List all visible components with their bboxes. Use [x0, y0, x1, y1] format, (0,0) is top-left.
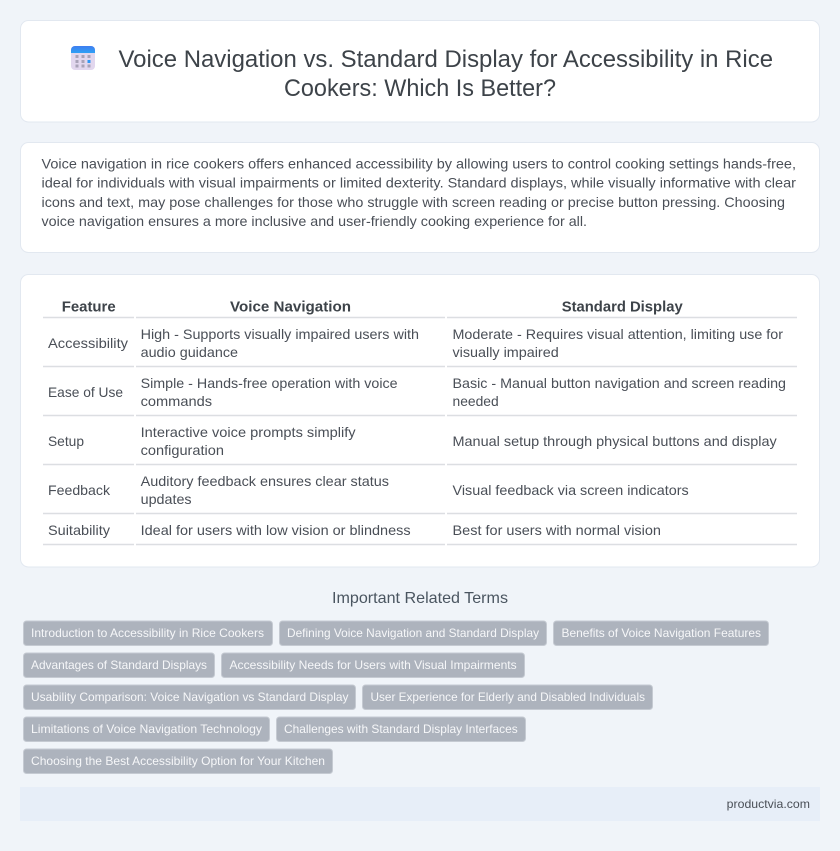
text block: introduction: Voice navigation in rice cookers offers enhanced accessibility by allowing users to control cooking settings hands-free, [42, 156, 796, 172]
tag: limitations: Limitations of Voice Navigation Technology [31, 722, 262, 736]
row: setup [48, 424, 777, 458]
tag: introduction [24, 621, 272, 646]
tag: usability comparison [24, 685, 356, 710]
row: suitability: Ideal for users with low vision or blindness [141, 522, 411, 538]
row: setup: configuration [141, 442, 224, 458]
row: accessibility: High - Supports visually impaired users with [141, 326, 419, 342]
tag: benefits: Benefits of Voice Navigation Features [562, 626, 761, 640]
row: feedback: updates [141, 491, 192, 507]
row: feedback: Auditory feedback ensures clear status [141, 473, 389, 489]
row: ease of use: commands [141, 393, 212, 409]
row: feedback [48, 473, 689, 507]
tag: accessibility needs [222, 653, 524, 678]
row: ease of use [48, 375, 786, 409]
row: accessibility: visually impaired [452, 344, 559, 360]
panel: header [20, 20, 820, 122]
row: suitability [48, 522, 661, 538]
tag: defining [280, 621, 546, 646]
row: ease of use: needed [452, 393, 499, 409]
text block: introduction: voice navigation ensures a more inclusive and user-friendly cooking experience for all. [42, 213, 587, 229]
row: accessibility [48, 326, 783, 360]
title: Cookers: Which Is Better? [284, 75, 556, 102]
row: suitability: Suitability [48, 522, 110, 538]
footer [20, 787, 820, 821]
tag: introduction: Introduction to Accessibility in Rice Cookers [31, 626, 264, 640]
icon: calendar [71, 46, 95, 70]
row: ease of use: Basic - Manual button navigation and screen reading [452, 375, 786, 391]
heading: important related terms: Important Related Terms [332, 590, 508, 607]
tag: defining: Defining Voice Navigation and Standard Display [287, 626, 539, 640]
text block: introduction: ideal for individuals with visual impairments or limited dexterity. Standard displays, while visually informative with clear [42, 175, 796, 191]
tag: benefits [554, 621, 768, 646]
tag: advantages: Advantages of Standard Displays [31, 658, 207, 672]
tag: user experience [362, 685, 652, 710]
tag: usability comparison: Usability Comparison: Voice Navigation vs Standard Display [31, 690, 348, 704]
text block: introduction [42, 156, 796, 229]
tag: limitations [24, 717, 270, 742]
panel: introduction [20, 142, 820, 252]
row: accessibility: Moderate - Requires visual attention, limiting use for [452, 326, 783, 342]
title: Voice Navigation vs. Standard Display for Accessibility in Rice [118, 46, 773, 73]
tag: choosing [24, 749, 332, 774]
row: accessibility: audio guidance [141, 344, 238, 360]
tag: challenges: Challenges with Standard Display Interfaces [284, 722, 518, 736]
table header: Voice Navigation [230, 299, 351, 316]
panel: related term tags [24, 621, 768, 774]
row: setup: Manual setup through physical buttons and display [452, 433, 777, 449]
tag: challenges [276, 717, 526, 742]
table header [62, 299, 683, 316]
row: setup: Setup [48, 433, 84, 449]
footer: productvia.com [727, 797, 810, 811]
row: accessibility: Accessibility [48, 335, 128, 351]
row: suitability: Best for users with normal vision [452, 522, 661, 538]
tag: user experience: User Experience for Elderly and Disabled Individuals [370, 690, 645, 704]
table header: Feature [62, 299, 116, 316]
tag: choosing: Choosing the Best Accessibility Option for Your Kitchen [31, 754, 325, 768]
row: ease of use: Simple - Hands-free operation with voice [141, 375, 398, 391]
row: feedback: Feedback [48, 482, 111, 498]
tag: advantages [24, 653, 214, 678]
text block: introduction: icons and text, may pose challenges for those who struggle with screen reading or precise button pressing. Choosing [42, 194, 785, 210]
row: feedback: Visual feedback via screen indicators [452, 482, 689, 498]
title [118, 46, 773, 102]
panel: comparison table [20, 274, 820, 567]
tag: accessibility needs: Accessibility Needs for Users with Visual Impairments [230, 658, 517, 672]
row: ease of use: Ease of Use [48, 384, 123, 400]
table header: Standard Display [562, 299, 683, 316]
row: setup: Interactive voice prompts simplify [141, 424, 356, 440]
